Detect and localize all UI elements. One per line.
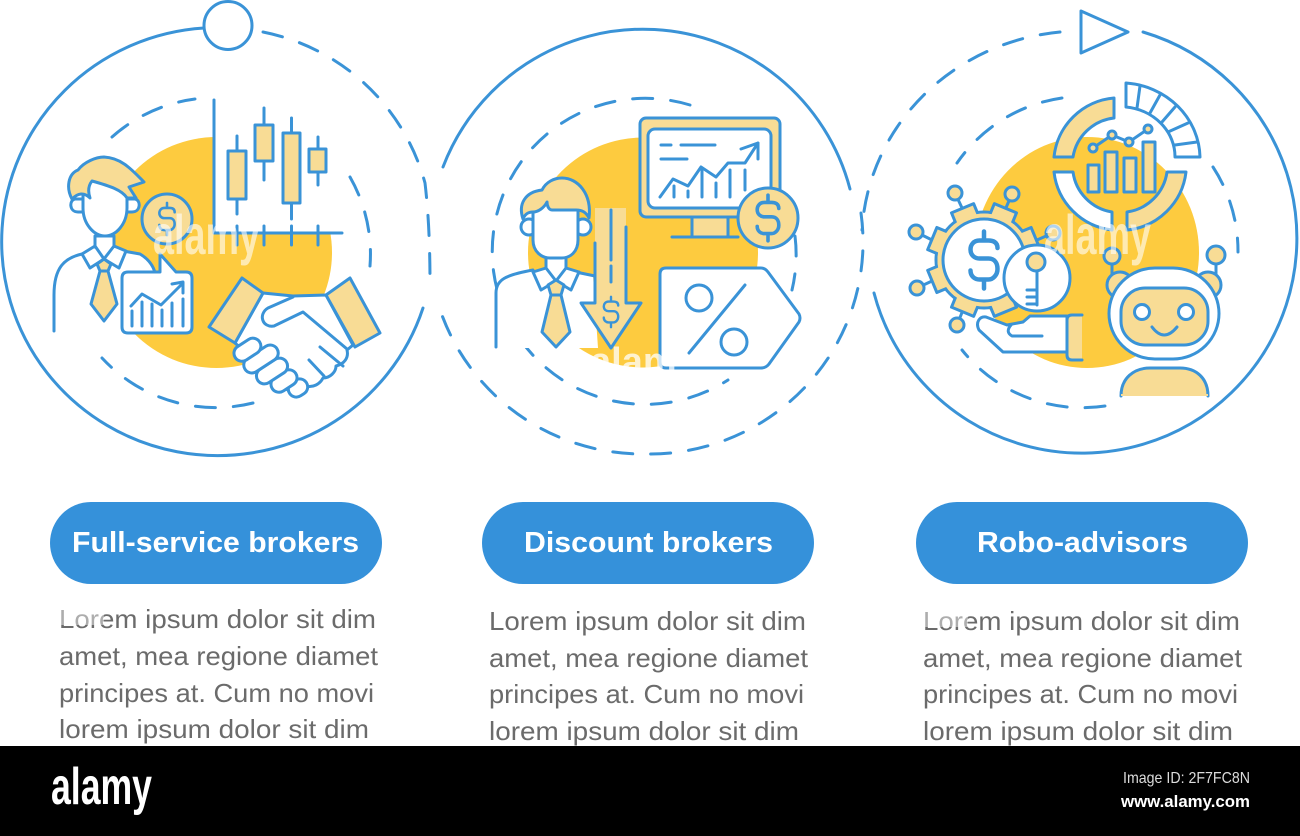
icon: open hand: [978, 315, 1082, 360]
text block: column 2: amet, mea regione diamet: [489, 643, 809, 673]
footer bar: [0, 746, 1300, 836]
outer ring 1: [2, 28, 430, 456]
text block: column 3: amet, mea regione diamet: [923, 643, 1243, 673]
icon: percent price tag: [660, 268, 800, 368]
text block: column 1: principes at. Cum no movi: [59, 678, 374, 708]
icon: candlestick chart: [214, 100, 342, 245]
pill heading: full-service brokers: Full-service brokers: [72, 527, 359, 559]
icon: dollar coin: [142, 194, 192, 244]
icon: gear with dollar: [909, 186, 1060, 332]
footer url: www.alamy.com: [1120, 792, 1250, 811]
icon: robot: [1104, 246, 1225, 396]
icon: monitor with growth chart: [640, 118, 780, 237]
text block: column 2: principes at. Cum no movi: [489, 679, 804, 709]
outer ring 3: [862, 32, 1297, 453]
text block: column 3: lorem ipsum dolor sit dim: [923, 716, 1233, 746]
watermark 1: alamy: [153, 203, 260, 266]
icon: key in circle: [1004, 245, 1070, 311]
text block: column 1: [58, 604, 379, 744]
panel: discount brokers: [437, 29, 863, 454]
icon: speech bubble chart: [122, 254, 192, 333]
step marker circle: [204, 2, 252, 50]
panel: robo-advisors: [862, 11, 1297, 453]
text block: column 2: [489, 606, 809, 746]
yellow disc 1: [101, 137, 332, 368]
pill heading: discount brokers: [482, 502, 814, 584]
icon: broker person: [54, 157, 156, 332]
icon: donut chart with bars: [1054, 83, 1200, 230]
panel: full-service brokers: [2, 2, 430, 456]
watermark 2: alam: [590, 341, 677, 383]
yellow disc 3: [975, 137, 1199, 368]
icon: discount broker person: [496, 178, 598, 348]
outer ring 2: [437, 29, 863, 454]
step marker triangle: [1081, 11, 1128, 53]
yellow disc 2: [528, 138, 758, 368]
inner dashed ring 1: [102, 99, 370, 408]
text block: column 3: principes at. Cum no movi: [923, 679, 1238, 709]
text block: column 2: Lorem ipsum dolor sit dim: [489, 606, 806, 636]
icon: monitor dollar coin: [738, 188, 798, 248]
inner dashed ring 2: [492, 98, 796, 404]
icon: handshake: [209, 278, 380, 400]
text block: column 1: Lorem ipsum dolor sit dim: [59, 604, 376, 634]
pill heading: discount brokers: Discount brokers: [524, 527, 773, 559]
text block: column 1: amet, mea regione diamet: [59, 641, 379, 671]
pill heading: robo-advisors: [916, 502, 1248, 584]
icon: down arrow with dollar: [581, 208, 641, 348]
watermark 3: alamy: [1044, 203, 1151, 266]
footer image id: Image ID: 2F7FC8N: [1123, 770, 1250, 787]
text block: column 1: lorem ipsum dolor sit dim: [59, 714, 369, 744]
text block: column 3: [922, 606, 1243, 746]
inner dashed ring 3: [957, 98, 1238, 408]
text block: column 3: Lorem ipsum dolor sit dim: [923, 606, 1240, 636]
footer logo: alamy: [51, 758, 152, 816]
pill heading: robo-advisors: Robo-advisors: [977, 527, 1188, 559]
pill heading: full-service brokers: [50, 502, 382, 584]
text block: column 2: lorem ipsum dolor sit dim: [489, 716, 799, 746]
